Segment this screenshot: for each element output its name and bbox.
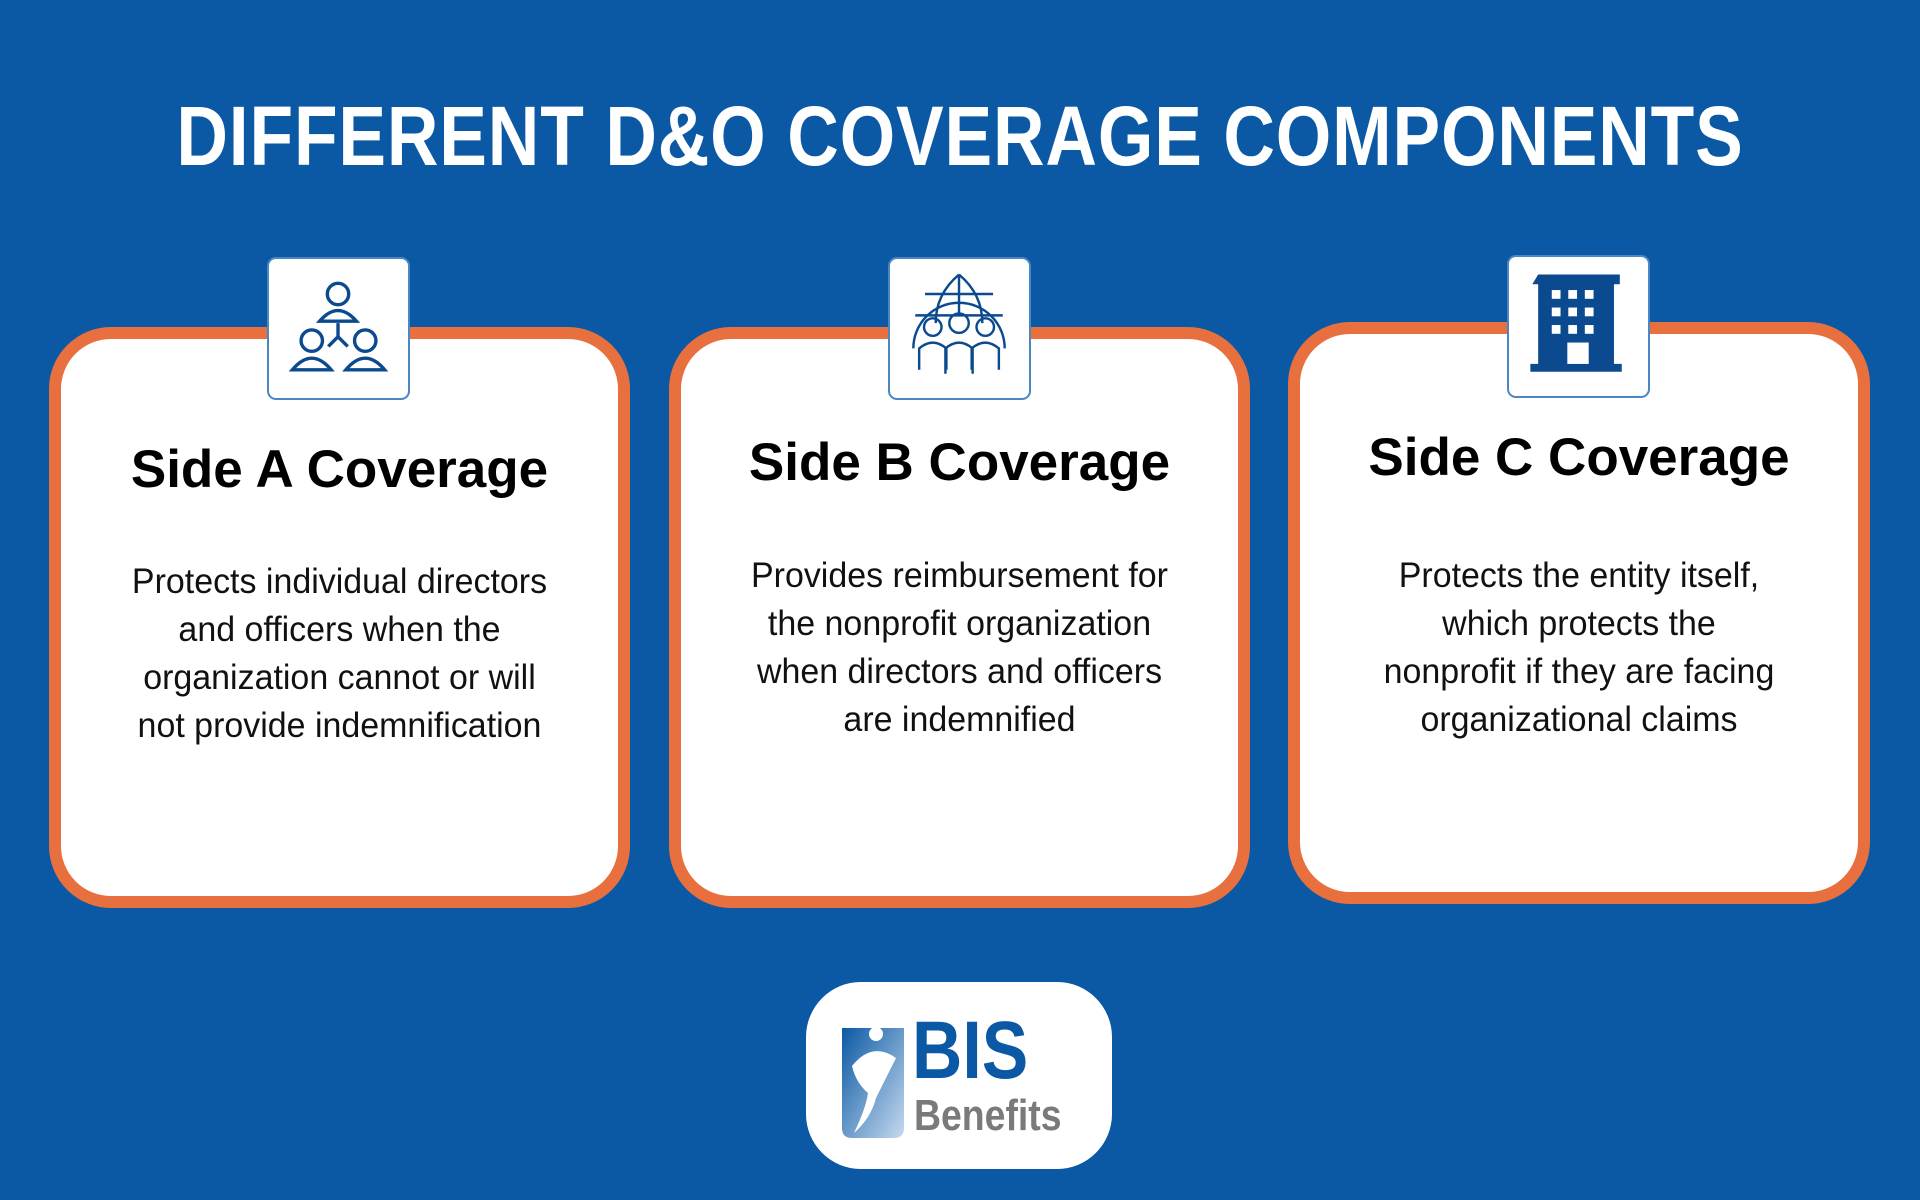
text C: organizational claims — [1420, 700, 1738, 739]
heading A: Side A Coverage — [131, 440, 548, 499]
text C — [1384, 556, 1774, 739]
logo mark — [842, 1028, 904, 1138]
logo — [806, 982, 1112, 1169]
text C: which protects the — [1442, 604, 1716, 643]
icon: globe people — [888, 257, 1031, 400]
logo: Benefits — [914, 1091, 1062, 1140]
text C: Protects the entity itself, — [1399, 556, 1759, 595]
text A: Protects individual directors — [132, 562, 547, 601]
text B: when directors and officers — [757, 652, 1162, 691]
logo text: BIS — [912, 1005, 1028, 1096]
text A: not provide indemnification — [138, 706, 541, 745]
text A: and officers when the — [178, 610, 501, 649]
text A — [132, 562, 547, 745]
text B: are indemnified — [843, 700, 1076, 739]
icon: building — [1507, 255, 1650, 398]
panel: side A — [49, 327, 630, 908]
title: DIFFERENT D&O COVERAGE COMPONENTS — [176, 89, 1744, 183]
heading B: Side B Coverage — [749, 433, 1170, 492]
text B: the nonprofit organization — [768, 604, 1151, 643]
text C: nonprofit if they are facing — [1384, 652, 1774, 691]
text A: organization cannot or will — [143, 658, 536, 697]
panel: side B — [669, 327, 1250, 908]
text B: Provides reimbursement for — [751, 556, 1168, 595]
text B — [751, 556, 1168, 739]
panel: side C — [1288, 322, 1870, 904]
heading C: Side C Coverage — [1368, 428, 1790, 487]
icon: people hierarchy — [267, 257, 410, 400]
